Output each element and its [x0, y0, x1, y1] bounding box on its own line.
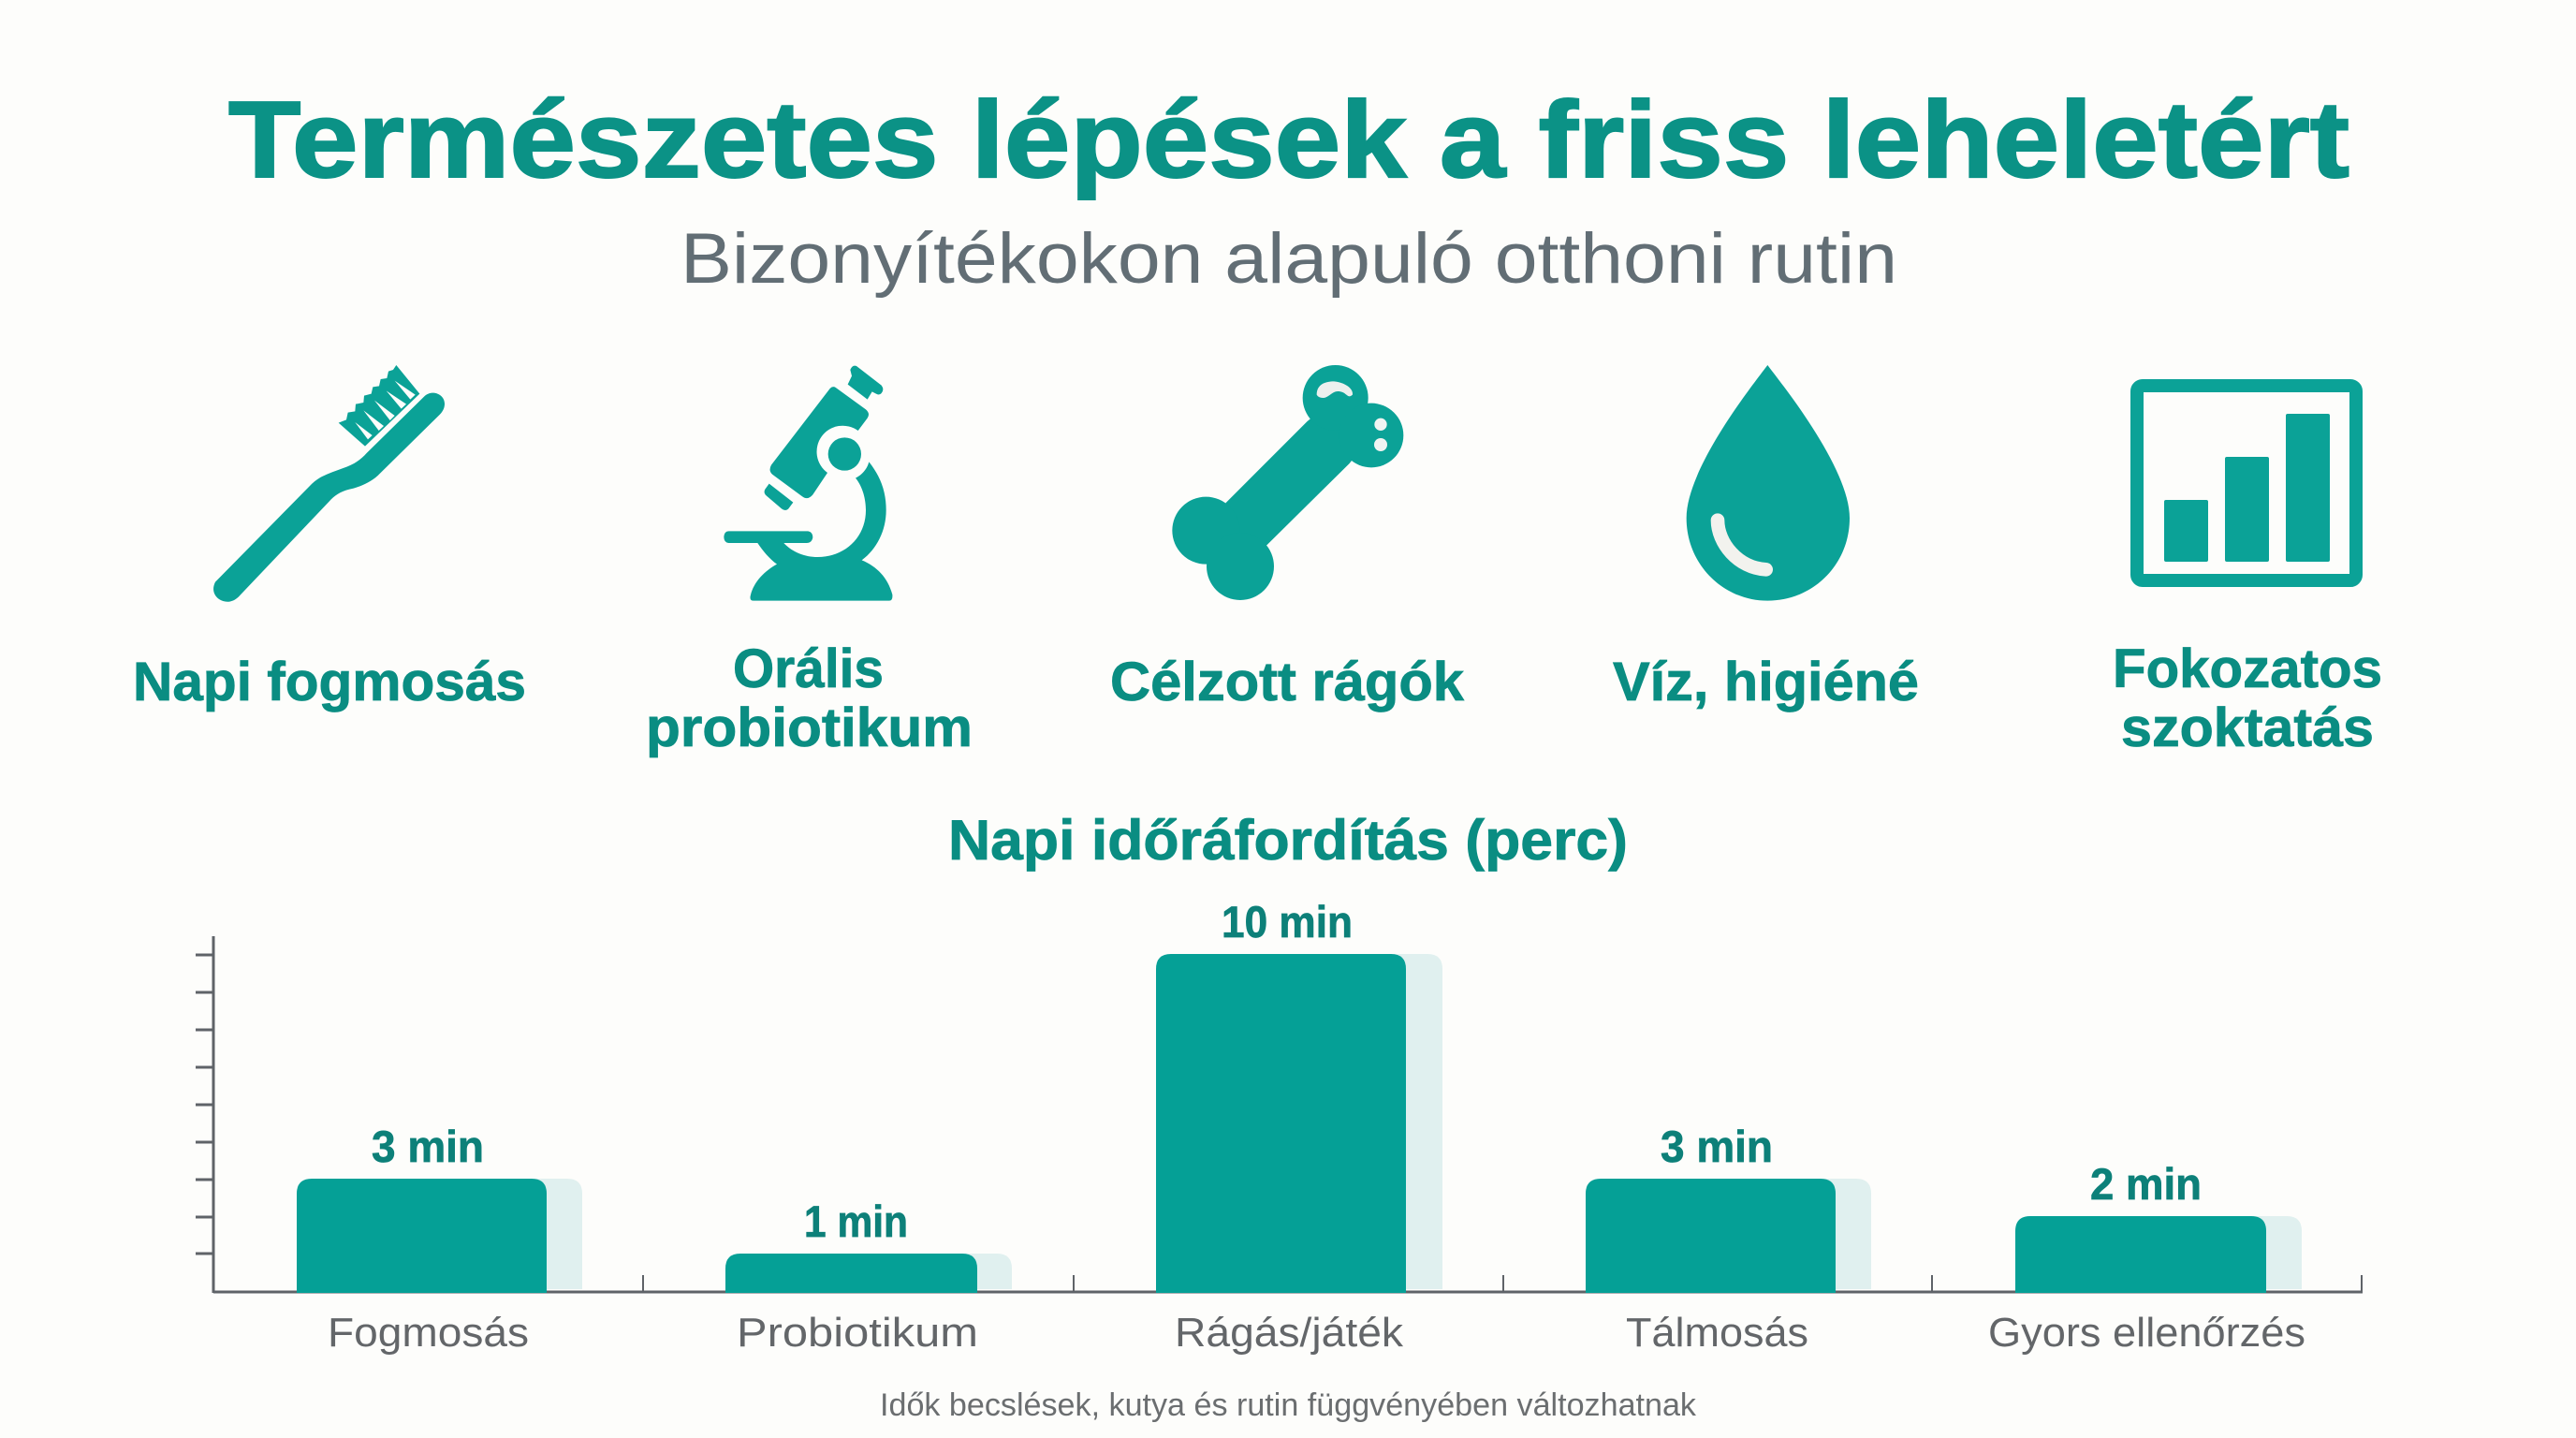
y axis with ticks	[196, 936, 213, 1293]
icon: toothbrush	[213, 365, 445, 602]
bar: Fogmosás 3 min	[297, 1179, 582, 1293]
bar: Probiotikum 1 min	[725, 1254, 1012, 1293]
bar: Gyors ellenőrzés 2 min	[2015, 1216, 2302, 1293]
axis label: Probiotikum: Probiotikum	[737, 1310, 978, 1356]
label: Napi fogmosás: Napi fogmosás	[133, 652, 526, 712]
bar chart	[196, 897, 2363, 1356]
icon: bar chart frame	[2137, 386, 2356, 580]
value: 10 min: 10 min	[1222, 897, 1353, 946]
label: Fokozatos szoktatás	[2113, 638, 2382, 758]
axis label: Rágás/játék: Rágás/játék	[1175, 1310, 1404, 1356]
chart heading: Napi időráfordítás (perc)	[948, 809, 1628, 872]
bar: Rágás/játék 10 min	[1156, 954, 1442, 1293]
axis label: Gyors ellenőrzés: Gyors ellenőrzés	[1988, 1310, 2305, 1356]
label: Orális probiotikum	[646, 638, 973, 758]
icon: microscope	[724, 366, 892, 601]
value: 1 min: 1 min	[804, 1196, 908, 1246]
icon: bone	[1172, 365, 1403, 600]
label: Orális probiotikum: probiotikum	[646, 697, 973, 758]
label: Fokozatos szoktatás: szoktatás	[2121, 697, 2374, 758]
footnote: Idők becslések, kutya és rutin függvényében változhatnak	[880, 1387, 1697, 1423]
axis label: Fogmosás: Fogmosás	[328, 1310, 529, 1356]
subtitle: Bizonyítékokon alapuló otthoni rutin	[681, 219, 1897, 299]
value: 2 min: 2 min	[2090, 1159, 2202, 1209]
title: Természetes lépések a friss leheletért	[228, 79, 2349, 200]
axis label: Tálmosás: Tálmosás	[1626, 1310, 1808, 1356]
value: 3 min: 3 min	[1661, 1122, 1773, 1171]
label: Fokozatos szoktatás: Fokozatos	[2113, 638, 2382, 699]
bar: Tálmosás 3 min	[1586, 1179, 1871, 1293]
value: 3 min: 3 min	[372, 1122, 484, 1171]
label: Orális probiotikum: Orális	[733, 638, 884, 699]
label: Víz, higiéné: Víz, higiéné	[1613, 652, 1919, 712]
icon: water drop	[1687, 365, 1850, 601]
label: Célzott rágók: Célzott rágók	[1110, 652, 1465, 712]
x axis with ticks	[213, 1275, 2363, 1292]
